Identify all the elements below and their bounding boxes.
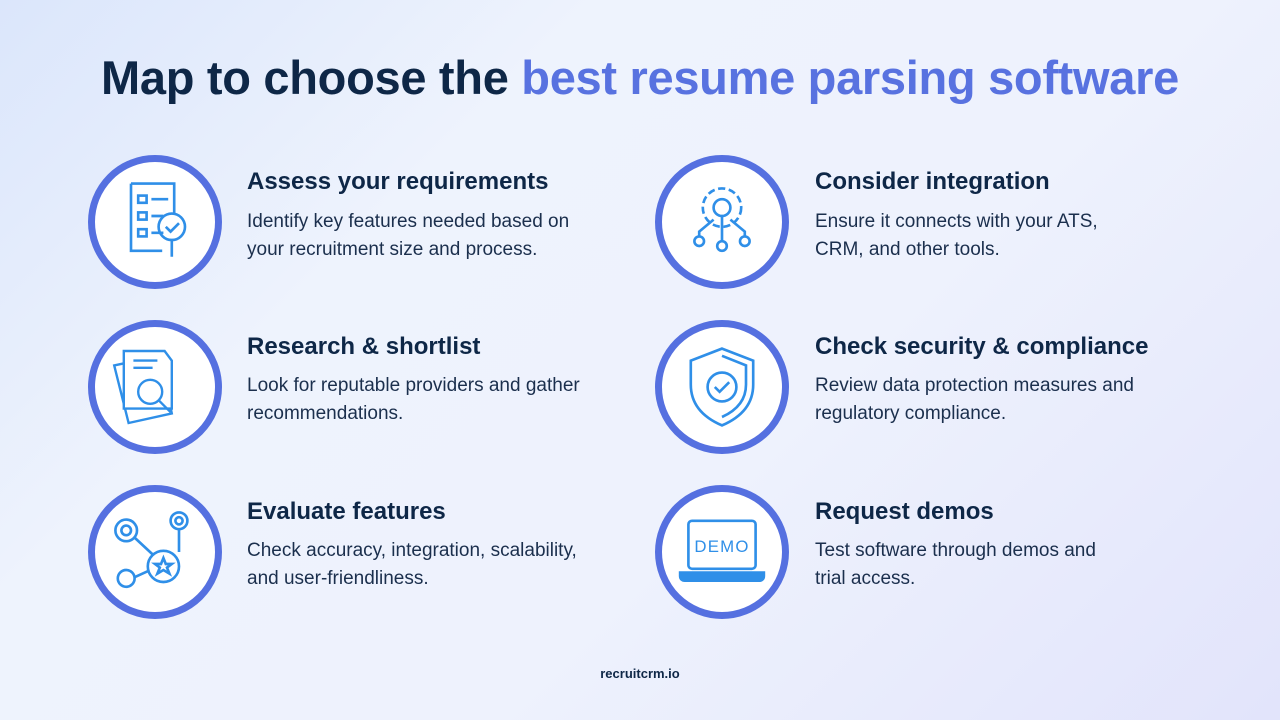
- icon: features: [88, 485, 222, 619]
- icon: research: [88, 320, 222, 454]
- text: features: Check accuracy, integration, scalability, and user-friendliness.: [247, 540, 577, 589]
- heading: demos: Request demos: [815, 498, 994, 525]
- icon: demo laptop: [655, 485, 789, 619]
- footer: recruitcrm.io: [600, 666, 680, 681]
- heading: features: Evaluate features: [247, 498, 446, 525]
- text: integration: Ensure it connects with your ATS, CRM, and other tools.: [815, 211, 1098, 260]
- icon: demo laptop: DEMO: [694, 537, 750, 556]
- icon: checklist: [88, 155, 222, 289]
- icon: shield: [655, 320, 789, 454]
- text: demos: Test software through demos and trial access.: [815, 540, 1096, 589]
- text: security: Review data protection measures and regulatory compliance.: [815, 375, 1134, 424]
- icon: integration: [655, 155, 789, 289]
- heading: assess: Assess your requirements: [247, 168, 548, 195]
- heading: security: Check security & compliance: [815, 333, 1148, 360]
- heading: integration: Consider integration: [815, 168, 1050, 195]
- heading: research: Research & shortlist: [247, 333, 480, 360]
- text: assess: Identify key features needed based on your recruitment size and process.: [247, 211, 569, 260]
- text: research: Look for reputable providers and gather recommendations.: [247, 375, 580, 424]
- title: Map to choose the best resume parsing software: [101, 51, 1179, 104]
